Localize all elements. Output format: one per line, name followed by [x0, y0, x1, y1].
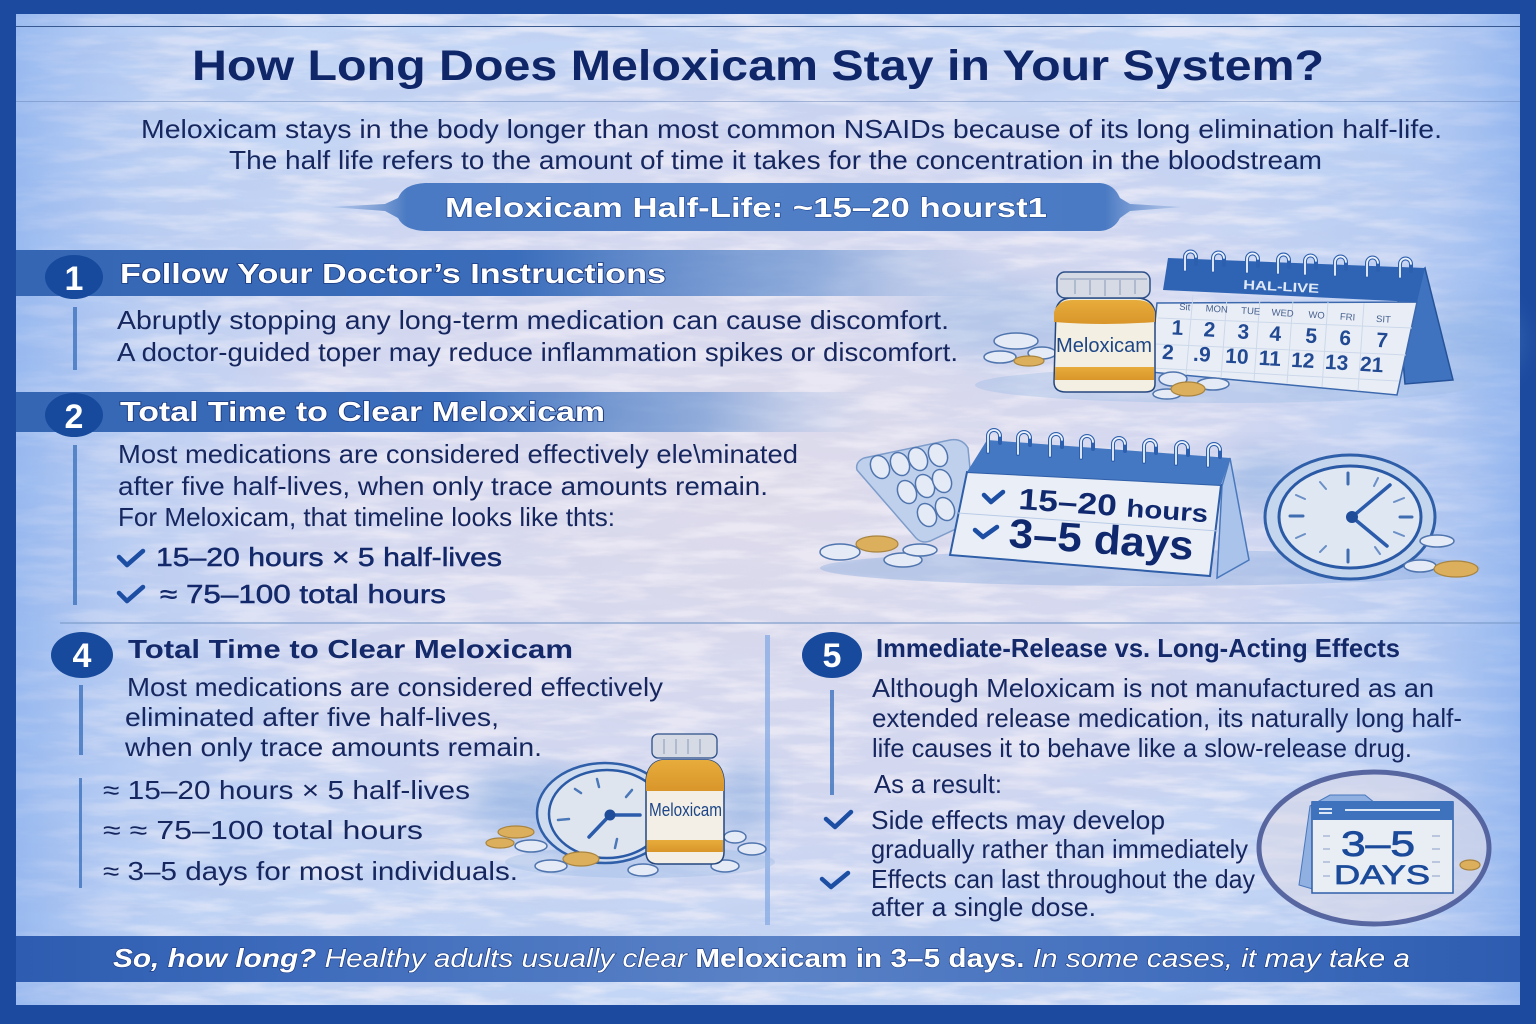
footer band — [16, 936, 1520, 982]
step 5 heading: Immediate-Release vs. Long-Acting Effects — [876, 633, 1400, 663]
loose pills — [984, 333, 1229, 399]
step 2 text: after five half-lives, when only trace amounts remain. — [118, 471, 768, 501]
illustration: bottle and half-life calendar — [975, 252, 1475, 403]
panel: step 2 — [16, 392, 876, 609]
calendar dates: 6 — [1339, 327, 1352, 350]
intro text: The half life refers to the amount of time it takes for the concentration in the bloodstream — [229, 145, 1322, 175]
loose pills — [820, 535, 1478, 577]
step 1 text: Abruptly stopping any long-term medication can cause discomfort. — [117, 305, 949, 335]
calendar dates: TUE — [1241, 306, 1260, 318]
calendar dates: 4 — [1269, 322, 1282, 346]
calendar dates: 11 — [1258, 347, 1282, 371]
clock — [537, 763, 673, 863]
step 1 text — [73, 305, 958, 370]
blister pack — [857, 440, 975, 542]
step 4 badge — [51, 632, 113, 678]
step 5 text: As a result: — [874, 769, 1002, 799]
time calendar — [950, 430, 1230, 576]
step 1 badge — [45, 255, 103, 299]
panel: step 5 — [802, 632, 1462, 922]
step 2 badge — [45, 393, 103, 437]
step 2 checklist: 15–20 hours × 5 half-lives — [156, 542, 502, 572]
calendar dates: 2 — [1203, 318, 1216, 342]
calendar dates: 21 — [1359, 353, 1384, 377]
step 2 checklist — [119, 542, 502, 609]
footer band: So, how long? Healthy adults usually clear Meloxicam in 3–5 days. In some cases, it may take a — [113, 943, 1410, 973]
title: How Long Does Meloxicam Stay in Your System? — [192, 42, 1324, 90]
step 4 badge: 4 — [73, 637, 92, 675]
calendar dates: SIT — [1376, 314, 1391, 326]
calendar dates: 13 — [1324, 351, 1349, 375]
clock — [1265, 455, 1435, 579]
bottle: Meloxicam — [649, 800, 722, 820]
step 5 checklist: gradually rather than immediately — [871, 834, 1248, 864]
calendar dates: 5 — [1305, 325, 1318, 348]
step 4 text: eliminated after five half-lives, — [125, 702, 499, 732]
step 2 badge: 2 — [65, 398, 83, 436]
badge: 3–5 days calendar: DAYS — [1334, 860, 1430, 890]
bottle — [1054, 272, 1155, 392]
calendar dates — [1161, 301, 1391, 378]
badge: 3–5 days calendar — [1259, 772, 1489, 924]
time calendar: 3–5 days — [1007, 510, 1195, 569]
step 2 heading: Total Time to Clear Meloxicam — [120, 396, 605, 427]
calendar dates: 1 — [1171, 316, 1184, 340]
step 1 banner — [16, 250, 1016, 296]
half-life ribbon — [330, 183, 1182, 231]
calendar page — [1150, 295, 1417, 395]
step 2 banner — [16, 392, 876, 432]
step 4 list: ≈ 3–5 days for most individuals. — [103, 856, 518, 886]
step 4 list — [79, 775, 518, 888]
panel: step 1 — [16, 250, 1016, 370]
panel: step 4 — [51, 632, 663, 888]
step 2 text — [73, 439, 798, 605]
step 5 text: extended release medication, its naturally long half- — [872, 703, 1462, 733]
calendar dates: 12 — [1290, 349, 1315, 373]
step 5 badge: 5 — [823, 637, 841, 675]
step 1 heading: Follow Your Doctor’s Instructions — [120, 258, 666, 289]
step 2 text: Most medications are considered effectively ele\minated — [118, 439, 798, 469]
intro text: Meloxicam stays in the body longer than most common NSAIDs because of its long elimination half-life. — [141, 114, 1442, 144]
step 5 badge — [802, 632, 862, 678]
step 1 text: A doctor-guided toper may reduce inflammation spikes or discomfort. — [117, 337, 958, 367]
loose pills — [486, 826, 766, 876]
calendar header — [1163, 252, 1425, 302]
step 5 text: Although Meloxicam is not manufactured as an — [872, 673, 1434, 703]
calendar dates: WED — [1271, 307, 1294, 320]
step 4 text: Most medications are considered effectively — [127, 672, 663, 702]
step 2 checklist: ≈ 75–100 total hours — [160, 579, 446, 609]
calendar back leaf — [1217, 458, 1249, 578]
calendar dates: FRI — [1340, 312, 1355, 324]
illustration: blister, calendar and clock — [820, 430, 1480, 586]
step 5 checklist: Effects can last throughout the day — [871, 864, 1255, 894]
step 4 heading: Total Time to Clear Meloxicam — [128, 634, 573, 664]
calendar dates: 10 — [1225, 345, 1249, 369]
step 5 checklist: after a single dose. — [871, 892, 1096, 922]
step 5 text — [830, 673, 1462, 799]
bottle: Meloxicam — [1056, 335, 1152, 357]
step 5 text: life causes it to behave like a slow-release drug. — [872, 733, 1412, 763]
step 2 text: For Meloxicam, that timeline looks like thts: — [118, 502, 615, 532]
illustration: clock and bottle — [486, 734, 775, 878]
step 5 checklist: Side effects may develop — [871, 805, 1165, 835]
calendar back leaf — [1398, 268, 1453, 384]
step 4 text — [79, 672, 663, 762]
calendar dates: Sit — [1179, 302, 1191, 313]
intro text — [141, 114, 1442, 175]
bottle — [646, 734, 724, 864]
calendar dates: .9 — [1193, 343, 1211, 367]
calendar header: HAL-LIVE — [1243, 277, 1320, 296]
step 1 badge: 1 — [65, 260, 83, 298]
calendar dates: WO — [1308, 310, 1325, 322]
badge: 3–5 days calendar: 3–5 — [1341, 825, 1415, 864]
calendar dates: 3 — [1237, 320, 1250, 344]
calendar dates: 2 — [1161, 341, 1175, 365]
step 4 list: ≈ ≈ 75–100 total hours — [103, 815, 423, 845]
step 4 text: when only trace amounts remain. — [124, 732, 542, 762]
calendar dates: MON — [1205, 303, 1228, 316]
half-life ribbon: Meloxicam Half-Life: ~15–20 hourst1 — [445, 192, 1047, 223]
step 5 checklist — [822, 805, 1255, 922]
time calendar: 15–20 hours — [1018, 483, 1209, 529]
step 4 list: ≈ 15–20 hours × 5 half-lives — [103, 775, 470, 805]
calendar dates: 7 — [1376, 329, 1389, 353]
